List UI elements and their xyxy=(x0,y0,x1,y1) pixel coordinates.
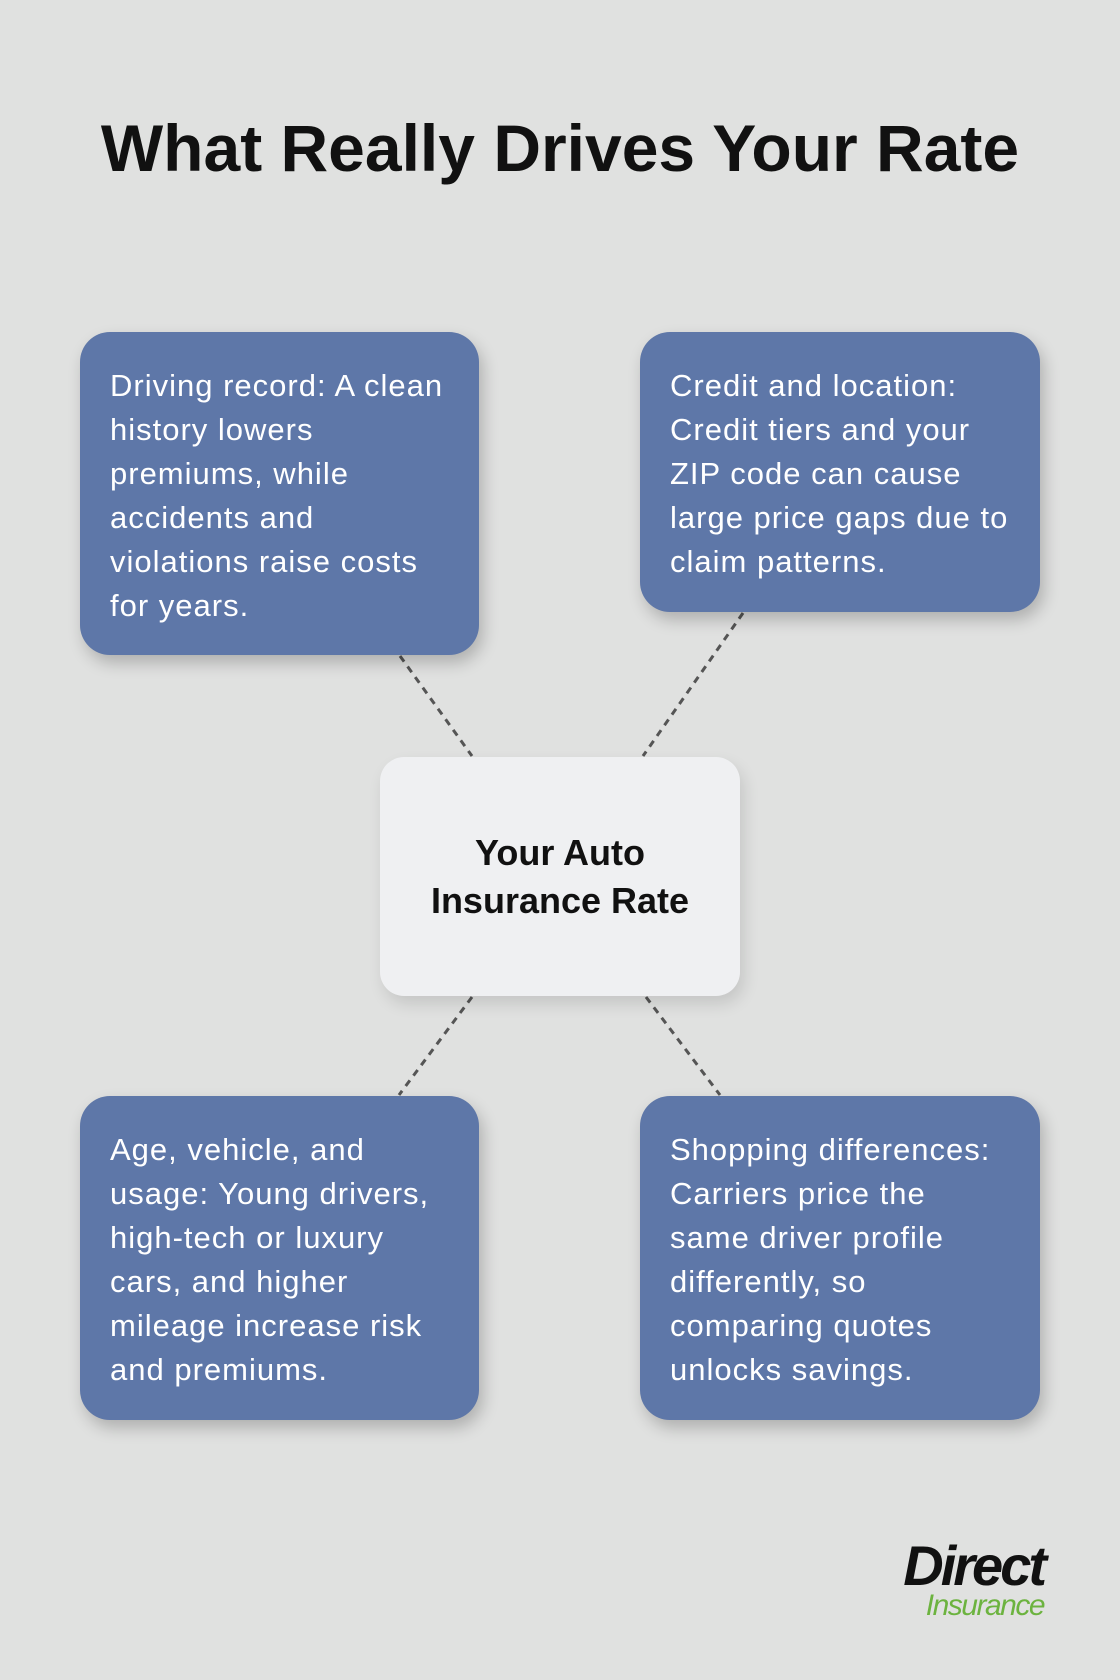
panel: shopping differences xyxy=(640,1096,1040,1420)
logo xyxy=(903,1534,1049,1622)
panel: shopping differences: same driver profile xyxy=(670,1220,944,1255)
panel: driving record: accidents and xyxy=(110,500,314,535)
panel: credit and location: Credit and location: xyxy=(670,368,957,403)
title: What Really Drives Your Rate xyxy=(101,111,1019,185)
panel: shopping differences: Carriers price the xyxy=(670,1176,926,1211)
panel: age vehicle usage: and premiums. xyxy=(110,1352,328,1387)
panel: age vehicle usage: mileage increase risk xyxy=(110,1308,422,1343)
panel: driving record: violations raise costs xyxy=(110,544,418,579)
center node xyxy=(380,757,740,996)
panel: driving record: Driving record: A clean xyxy=(110,368,443,403)
logo: Insurance xyxy=(926,1589,1044,1622)
panel: shopping differences: differently, so xyxy=(670,1264,867,1299)
panel: age vehicle usage: Age, vehicle, and xyxy=(110,1132,365,1167)
panel: shopping differences: comparing quotes xyxy=(670,1308,932,1343)
panel: driving record xyxy=(80,332,479,655)
logo: Direct xyxy=(903,1534,1044,1597)
panel: age vehicle usage: usage: Young drivers, xyxy=(110,1176,429,1211)
panel: driving record: history lowers xyxy=(110,412,314,447)
center node: Insurance Rate xyxy=(431,880,689,920)
panel: driving record: for years. xyxy=(110,588,249,623)
panel: driving record: premiums, while xyxy=(110,456,349,491)
panel: age vehicle usage: high-tech or luxury xyxy=(110,1220,384,1255)
panel: age vehicle usage xyxy=(80,1096,479,1420)
panel: credit and location: claim patterns. xyxy=(670,544,887,579)
panel: shopping differences: unlocks savings. xyxy=(670,1352,913,1387)
panel: age vehicle usage: cars, and higher xyxy=(110,1264,348,1299)
panel: shopping differences: Shopping differences: xyxy=(670,1132,990,1167)
panel: credit and location: ZIP code can cause xyxy=(670,456,961,491)
panel: credit and location xyxy=(640,332,1040,612)
panel: credit and location: Credit tiers and your xyxy=(670,412,970,447)
center node: Your Auto xyxy=(475,832,645,872)
panel: credit and location: large price gaps due to xyxy=(670,500,1008,535)
